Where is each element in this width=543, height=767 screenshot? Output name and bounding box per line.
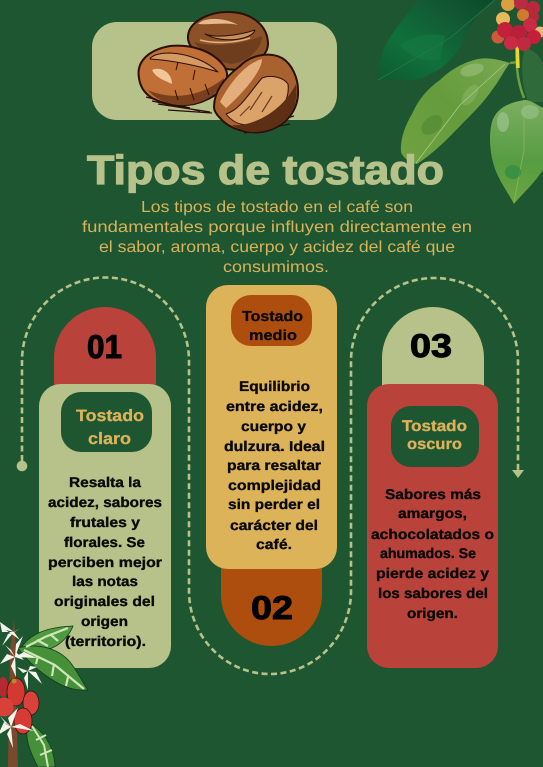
description: complejidad	[228, 477, 321, 493]
description: amargos,	[398, 505, 467, 521]
description: entre acidez,	[226, 398, 323, 414]
panel: tostado claro description: perciben mejor	[48, 554, 163, 570]
label text: medio	[249, 328, 297, 344]
panel: tostado claro description: originales del	[54, 593, 155, 609]
number tab 01	[54, 307, 156, 386]
label text: Tostado	[242, 309, 303, 325]
description: pierde acidez y	[376, 565, 489, 581]
number tab 02	[221, 567, 322, 646]
dashed route lines	[22, 278, 518, 674]
illustration: coffee branch bottom left	[0, 620, 88, 767]
description: origen.	[407, 605, 458, 621]
description: para resaltar	[227, 457, 322, 473]
number 01: 01	[87, 328, 122, 365]
intro paragraph: fundamentales porque influyen directamente en	[82, 219, 472, 236]
panel: tostado claro description: florales. Se	[64, 534, 145, 550]
banner behind coffee beans	[92, 22, 337, 120]
illustration: coffee beans	[139, 12, 298, 133]
label text: oscuro	[407, 436, 462, 453]
panel: tostado claro description: origen	[81, 613, 128, 629]
route start dot	[17, 461, 27, 471]
number 02: 02	[251, 589, 293, 626]
route end arrow	[512, 470, 524, 478]
description	[371, 486, 494, 621]
description: café.	[256, 536, 292, 552]
intro paragraph: consumimos.	[223, 259, 329, 276]
panel: tostado claro description: las notas	[72, 573, 138, 589]
label pill	[61, 392, 152, 452]
label text: Tostado	[402, 418, 467, 435]
bean right	[214, 55, 298, 132]
description: Sabores más	[385, 486, 481, 502]
panel: tostado oscuro	[367, 307, 498, 668]
number 03: 03	[410, 327, 452, 364]
panel: tostado claro description: (territorio).	[65, 633, 146, 649]
bean left	[139, 46, 227, 105]
description: sin perder el	[228, 496, 320, 512]
title: Tipos de tostado	[87, 147, 444, 193]
description: los sabores del	[378, 585, 488, 601]
description: carácter del	[230, 517, 318, 533]
panel: tostado medio	[206, 285, 337, 646]
bean top	[188, 12, 268, 70]
label text: claro	[88, 430, 131, 448]
description: cuerpo y	[241, 418, 306, 434]
card body	[367, 384, 498, 668]
panel: tostado claro	[39, 307, 171, 668]
panel: tostado claro description: acidez, sabores	[48, 494, 162, 510]
label pill	[231, 295, 312, 346]
intro paragraph: el sabor, aroma, cuerpo y acidez del café que	[99, 239, 455, 256]
label pill	[391, 406, 479, 467]
description: ahumados. Se	[380, 545, 476, 561]
description: Equilibrio	[239, 378, 310, 394]
label text	[76, 407, 144, 448]
description	[224, 378, 325, 552]
description: achocolatados o	[371, 526, 494, 542]
card body	[206, 285, 337, 569]
card body	[39, 384, 171, 668]
panel: tostado claro description: frutales y	[70, 514, 140, 530]
intro paragraph	[82, 199, 472, 276]
panel: tostado claro description: Resalta la	[69, 474, 141, 490]
number tab 03	[382, 307, 484, 386]
label text	[402, 418, 467, 453]
label text	[242, 309, 303, 344]
illustration: coffee branch with leaves and red cherries	[378, 0, 543, 204]
label text: Tostado	[76, 407, 144, 425]
description: dulzura. Ideal	[224, 438, 325, 454]
intro paragraph: Los tipos de tostado en el café son	[141, 199, 413, 216]
panel: tostado claro description	[48, 474, 163, 649]
